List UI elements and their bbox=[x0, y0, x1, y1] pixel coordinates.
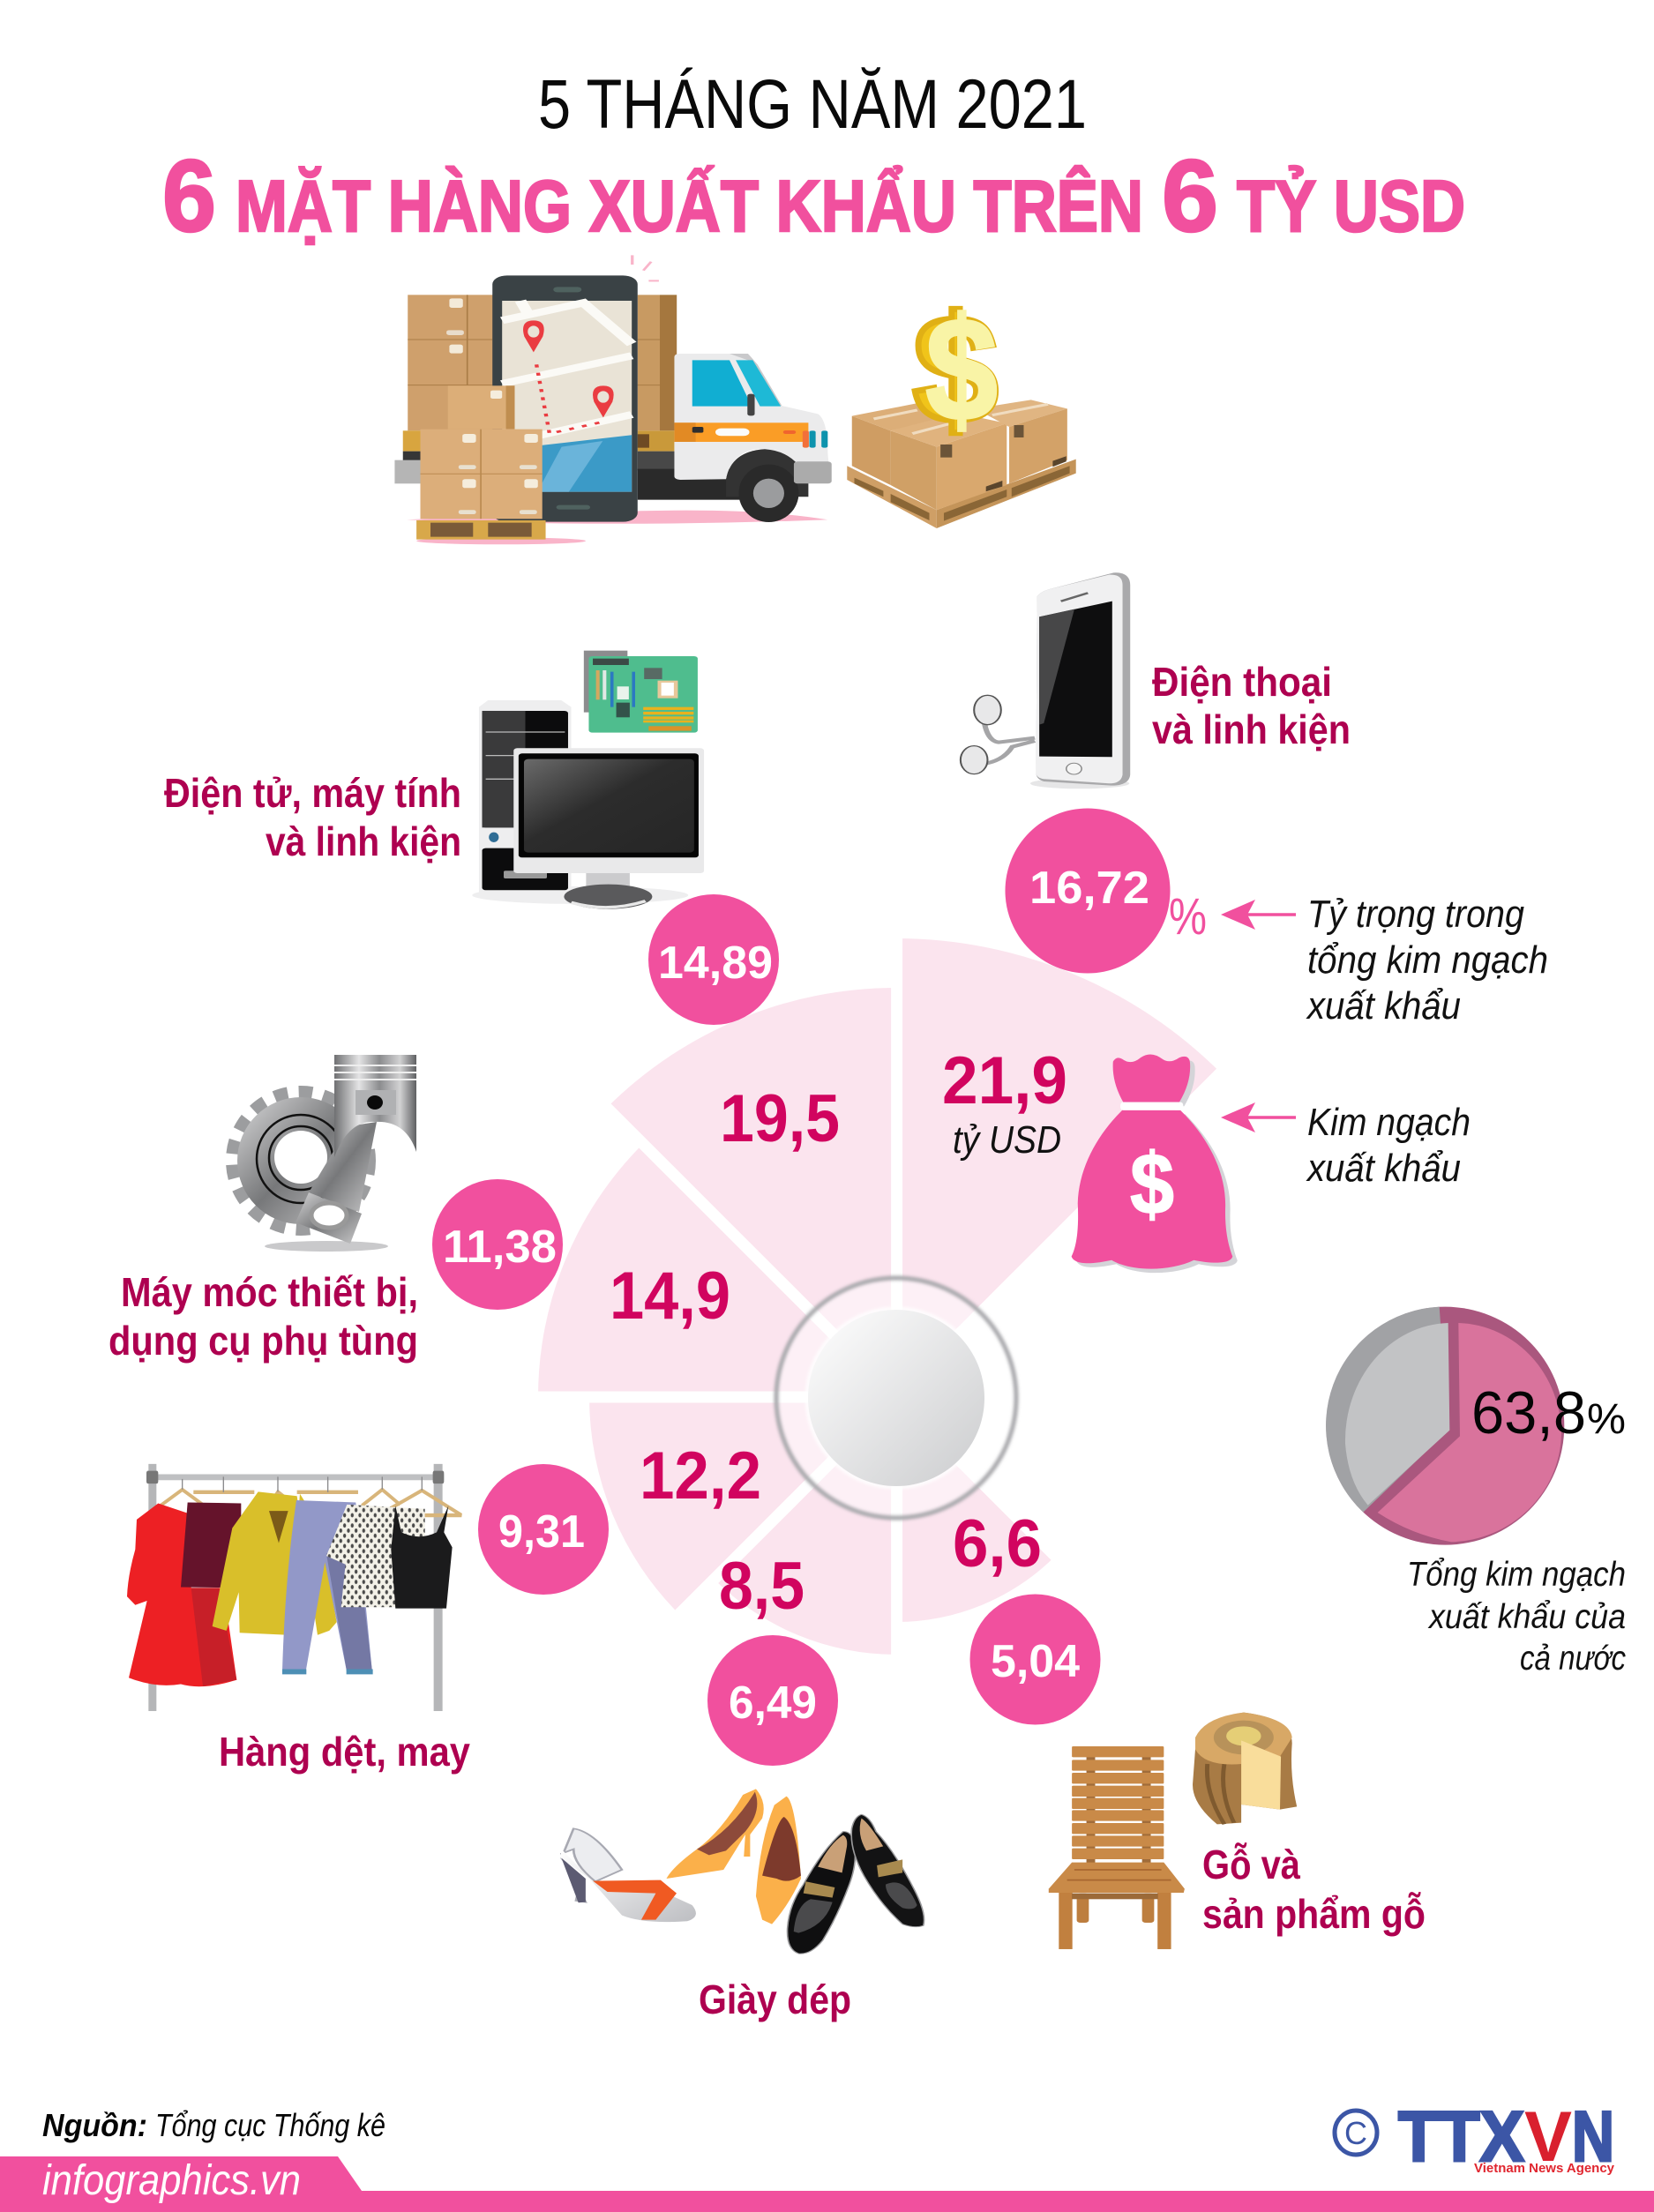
pie caption bbox=[1407, 1556, 1626, 1678]
unit label: billion USD: tỷ USD bbox=[953, 1118, 1061, 1162]
legend text: export turnover bbox=[1306, 1101, 1471, 1190]
legend text: share of total exports bbox=[1306, 893, 1548, 1028]
circle: machinery 11,38 bbox=[432, 1179, 563, 1310]
source: Tổng cục Thống kê bbox=[155, 2107, 385, 2143]
label: phones bbox=[1152, 659, 1351, 752]
arrow: turnover bbox=[1221, 1102, 1296, 1132]
circle: textile 9,31 bbox=[478, 1464, 609, 1595]
logo: TTXVN: Vietnam News Agency bbox=[1474, 2161, 1615, 2176]
legend text: export turnover: Kim ngạch bbox=[1307, 1101, 1471, 1144]
legend text: share of total exports: Tỷ trọng trong bbox=[1307, 893, 1524, 936]
logo: TTXVN: TTX bbox=[1398, 2097, 1524, 2177]
icon: wooden chair and log bbox=[1049, 1713, 1297, 1949]
chart: radial export value sectors bbox=[520, 917, 1270, 1764]
icon: shoes bbox=[560, 1789, 924, 1954]
label: wood: sản phẩm gỗ bbox=[1202, 1891, 1426, 1937]
values: export turnover per sector: 14,9 bbox=[610, 1259, 730, 1334]
circle: footwear 6,49 bbox=[707, 1635, 838, 1766]
arrow: share bbox=[1221, 900, 1296, 930]
illustration: boxes on pallet with gold dollar bbox=[847, 285, 1076, 528]
logo: TTXVN: C bbox=[1344, 2115, 1367, 2151]
title line 2: 6 bbox=[1162, 138, 1218, 253]
label: phones: Điện thoại bbox=[1152, 659, 1332, 705]
values: export turnover per sector: 12,2 bbox=[640, 1439, 761, 1513]
percent sign: % bbox=[1169, 888, 1207, 945]
values: export turnover per sector: 21,9 bbox=[942, 1043, 1067, 1118]
source bbox=[42, 2107, 385, 2143]
circle: machinery 11,38: 11,38 bbox=[443, 1222, 557, 1273]
label: machinery bbox=[109, 1269, 418, 1364]
label: phones: và linh kiện bbox=[1152, 706, 1351, 752]
values: export turnover per sector: 8,5 bbox=[719, 1549, 805, 1624]
values: export turnover per sector bbox=[610, 1043, 1067, 1624]
circle: wood 5,04 bbox=[970, 1595, 1101, 1725]
source: Nguồn: bbox=[42, 2107, 147, 2143]
label: textile: Hàng dệt, may bbox=[219, 1729, 470, 1775]
title line 2: MẶT HÀNG XUẤT KHẨU TRÊN bbox=[236, 164, 1143, 247]
values: export turnover per sector: 6,6 bbox=[953, 1506, 1042, 1581]
icon: gear and piston bbox=[235, 1055, 416, 1252]
title line 2: 6 bbox=[162, 138, 216, 253]
label: electronics bbox=[164, 770, 461, 864]
logo: TTXVN: V bbox=[1524, 2097, 1572, 2177]
circle: footwear 6,49: 6,49 bbox=[729, 1678, 817, 1729]
icon: smartphone with earphones bbox=[961, 572, 1130, 788]
chart: pie 63.8% share bbox=[1326, 1307, 1564, 1545]
illustration: delivery truck, phone map and boxes bbox=[394, 255, 832, 544]
icon: money bag bbox=[1072, 1054, 1238, 1273]
illustration: boxes on pallet with gold dollar: $ bbox=[925, 288, 998, 452]
icon: desktop computer and motherboard bbox=[472, 651, 704, 909]
title line 1: 5 THÁNG NĂM 2021 bbox=[538, 64, 1087, 143]
website: infographics.vn bbox=[42, 2157, 301, 2204]
logo: TTXVN bbox=[1335, 2097, 1615, 2177]
logo: TTXVN: N bbox=[1572, 2097, 1614, 2177]
values: export turnover per sector: 19,5 bbox=[720, 1081, 840, 1156]
legend text: share of total exports: xuất khẩu bbox=[1306, 984, 1461, 1028]
pie caption: xuất khẩu của bbox=[1427, 1598, 1626, 1636]
circle: textile 9,31: 9,31 bbox=[498, 1506, 585, 1558]
pie caption: Tổng kim ngạch bbox=[1407, 1556, 1626, 1594]
label: electronics: và linh kiện bbox=[266, 818, 461, 864]
label: wood: Gỗ và bbox=[1202, 1842, 1300, 1887]
circle: wood 5,04: 5,04 bbox=[991, 1636, 1080, 1687]
icon: dollar sign on bag: $ bbox=[1130, 1135, 1174, 1232]
label: electronics: Điện tử, máy tính bbox=[164, 770, 461, 816]
footer banner bbox=[0, 2156, 1654, 2212]
circle: phones 16,72: 16,72 bbox=[1029, 863, 1149, 914]
title line 2: TỶ USD bbox=[1237, 165, 1465, 247]
circle: phones 16,72 bbox=[1006, 808, 1170, 974]
title line 2 bbox=[162, 138, 1465, 253]
icon: clothes on rack bbox=[127, 1464, 461, 1711]
pie value: % bbox=[1587, 1396, 1626, 1443]
legend text: share of total exports: tổng kim ngạch bbox=[1307, 938, 1548, 982]
illustration: boxes on pallet with gold dollar: $ bbox=[913, 285, 998, 454]
pie caption: cả nước bbox=[1520, 1640, 1626, 1678]
label: machinery: dụng cụ phụ tùng bbox=[109, 1318, 418, 1364]
label: wood bbox=[1202, 1842, 1426, 1937]
circle: electronics 14,89: 14,89 bbox=[658, 938, 773, 989]
circle: electronics 14,89 bbox=[648, 894, 779, 1025]
label: footwear: Giày dép bbox=[699, 1977, 851, 2022]
label: machinery: Máy móc thiết bị, bbox=[121, 1269, 418, 1315]
pie value: 63,8 bbox=[1471, 1379, 1586, 1446]
legend text: export turnover: xuất khẩu bbox=[1306, 1147, 1461, 1190]
